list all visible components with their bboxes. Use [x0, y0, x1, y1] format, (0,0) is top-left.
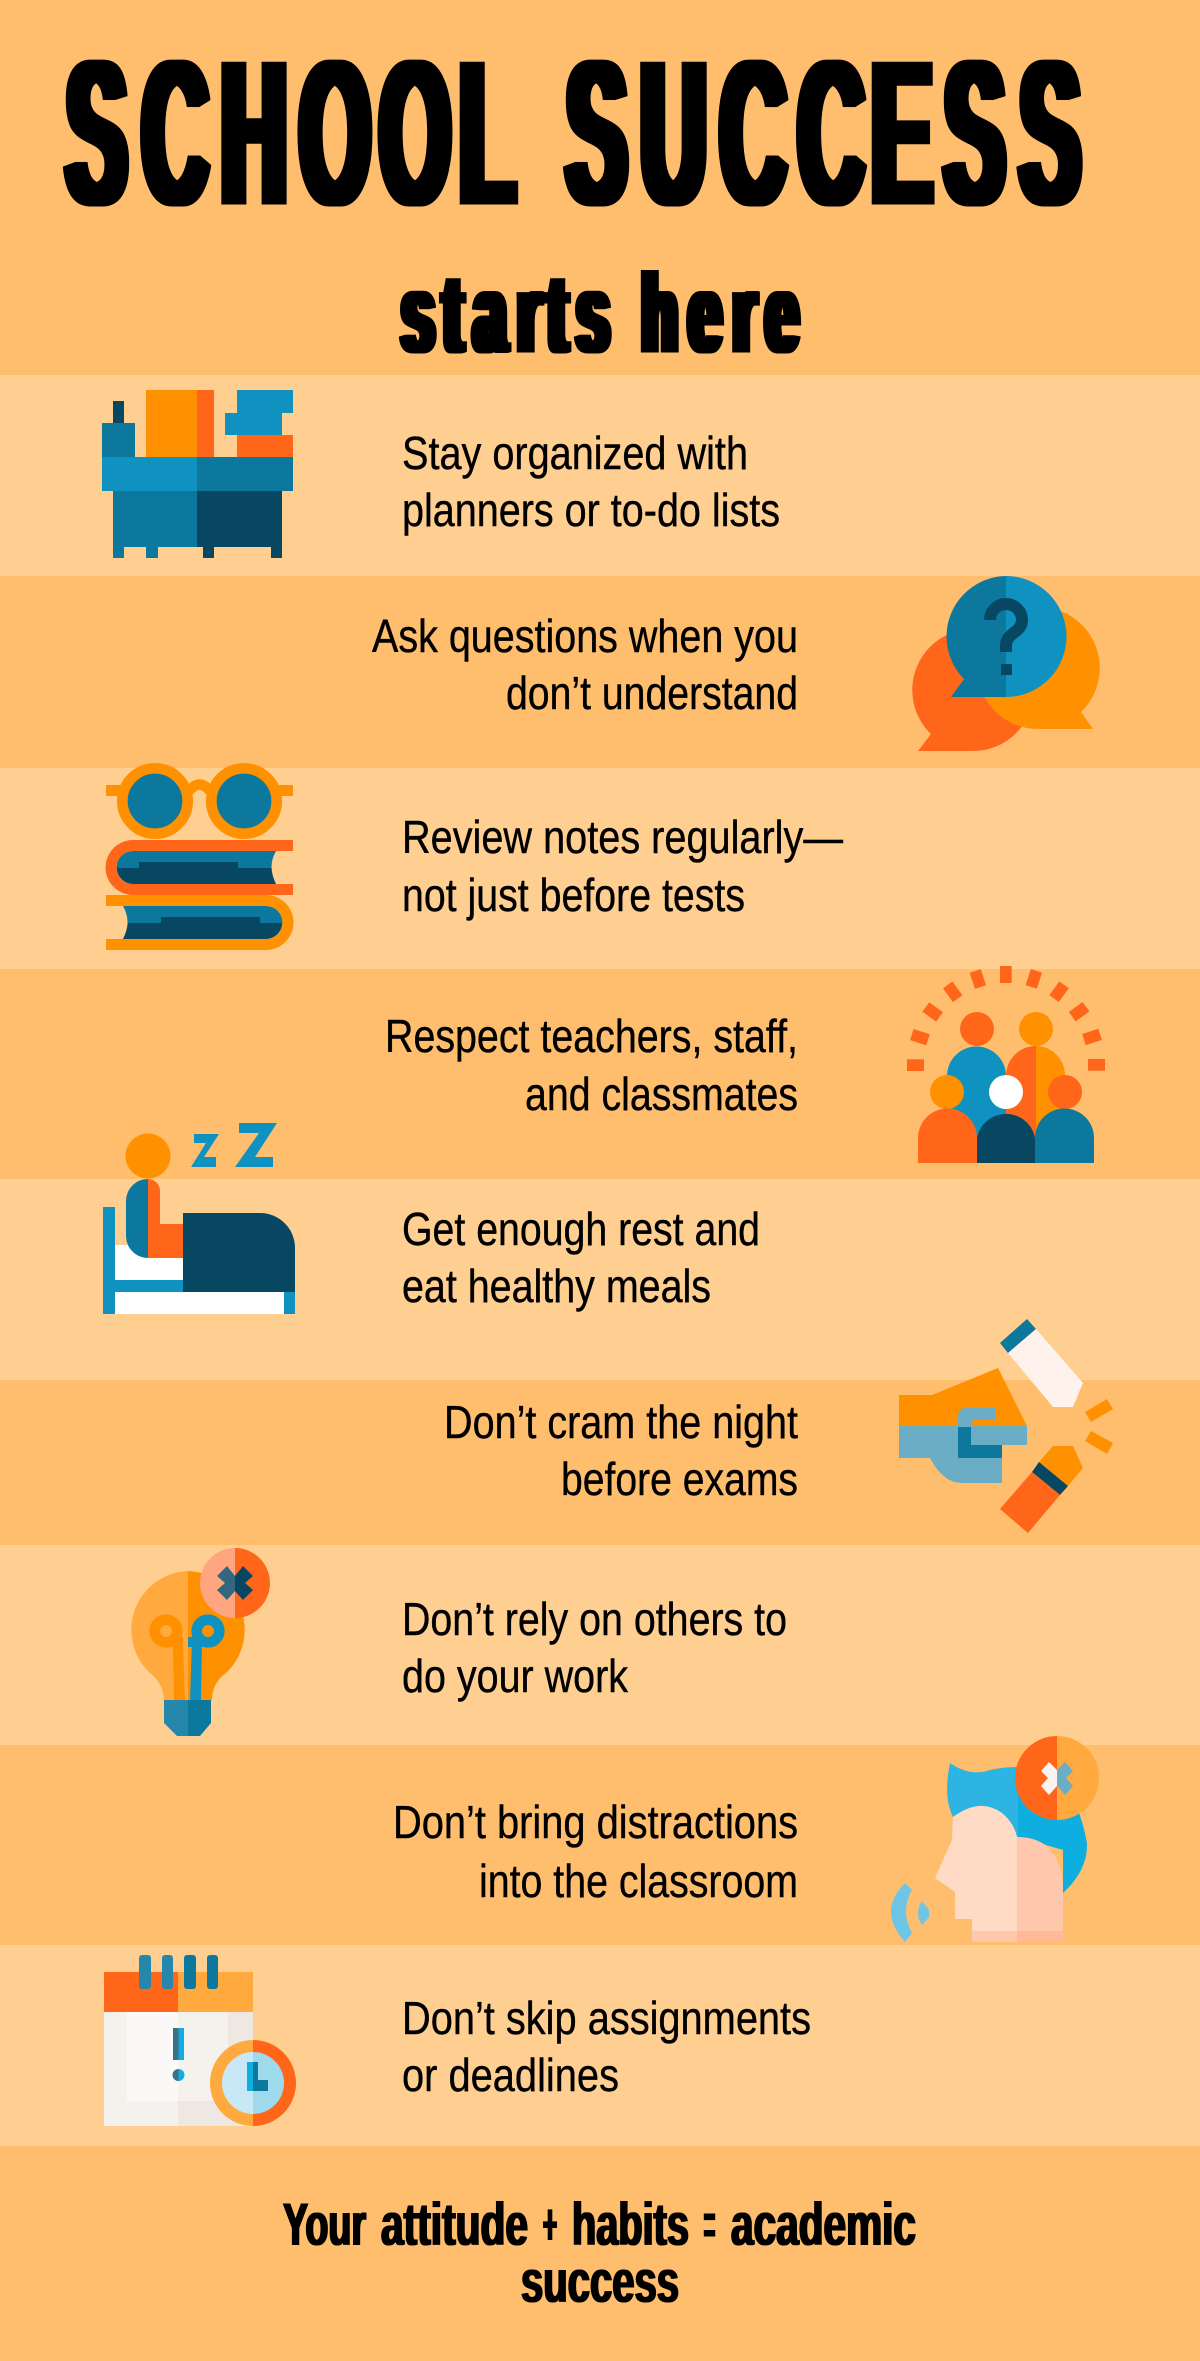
panel: rest and meals — [0, 1123, 1200, 1380]
panel: review notes — [0, 768, 1200, 969]
text: deadlines — [402, 1992, 811, 2101]
text: distractions: into the classroom — [479, 1855, 798, 1907]
panel: don't rely on others — [0, 1545, 1200, 1745]
footer message: Your — [283, 2191, 366, 2258]
icon: light bulb with cross — [131, 1548, 270, 1736]
panel: ask questions — [0, 576, 1200, 768]
text: distractions: Don’t bring distractions — [393, 1796, 798, 1848]
footer message: + — [543, 2191, 557, 2258]
subtitle: starts here — [402, 250, 798, 376]
text: rest and meals — [402, 1203, 760, 1312]
icon: calendar with clock — [104, 1955, 296, 2126]
icon: person in bed — [103, 1123, 295, 1314]
text: distractions — [393, 1796, 798, 1907]
panel: respect — [0, 966, 1200, 1179]
text: deadlines: or deadlines — [402, 2049, 619, 2101]
footer message: = — [704, 2191, 715, 2258]
footer message: attitude — [381, 2191, 528, 2258]
footer message: academic — [731, 2191, 916, 2258]
text: stay organized — [402, 427, 780, 536]
panel: deadlines — [0, 1945, 1200, 2146]
text: don't rely on others: Don’t rely on others to — [402, 1593, 787, 1645]
icon: hand breaking highlighter — [899, 1319, 1113, 1533]
text: stay organized: planners or to-do lists — [402, 484, 780, 536]
text: ask questions: Ask questions when you — [372, 610, 798, 662]
text: respect — [385, 1010, 798, 1120]
text: ask questions: don’t understand — [506, 667, 798, 719]
text: review notes: not just before tests — [402, 869, 745, 921]
text: don't rely on others: do your work — [402, 1650, 629, 1702]
icon: group of people — [907, 966, 1105, 1163]
icon: glasses and books — [106, 768, 293, 950]
text: don't cram — [444, 1396, 798, 1505]
icon: desk — [102, 390, 293, 558]
title: SCHOOL SUCCESS — [66, 18, 1080, 248]
text: don't rely on others — [402, 1593, 787, 1702]
panel: stay organized — [0, 375, 1200, 576]
panel: distractions — [0, 1736, 1200, 1945]
text: review notes: Review notes regularly— — [402, 811, 843, 863]
footer — [0, 2146, 1200, 2361]
panel: don't cram — [0, 1319, 1200, 1545]
text: respect: Respect teachers, staff, — [385, 1010, 798, 1062]
text: respect: and classmates — [525, 1068, 798, 1120]
footer message: habits — [572, 2191, 689, 2258]
text: rest and meals: Get enough rest and — [402, 1203, 760, 1255]
footer message — [283, 2191, 916, 2315]
text: rest and meals: eat healthy meals — [402, 1260, 711, 1312]
text: ask questions — [372, 610, 798, 719]
icon: head with cross — [891, 1736, 1099, 1942]
text: deadlines: Don’t skip assignments — [402, 1992, 811, 2044]
text: stay organized: Stay organized with — [402, 427, 748, 479]
footer message: success — [521, 2248, 679, 2315]
text: don't cram: Don’t cram the night — [444, 1396, 798, 1448]
text: don't cram: before exams — [561, 1453, 798, 1505]
icon: speech bubbles — [912, 576, 1100, 751]
text: review notes — [402, 811, 843, 921]
